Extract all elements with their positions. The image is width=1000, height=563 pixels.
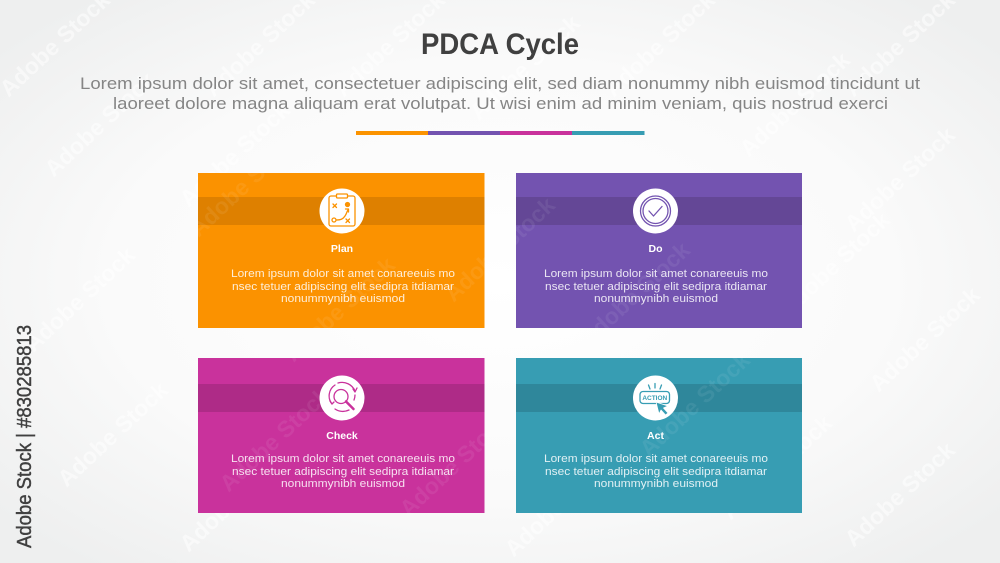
text: Adobe Stock	[174, 442, 295, 557]
text: Adobe Stock	[439, 192, 560, 307]
icon: strategy clipboard	[329, 194, 355, 226]
text block: Do: nsec tetuer adipiscing elit sedipra itdiamar	[545, 281, 767, 293]
text block: Plan: Lorem ipsum dolor sit amet conareeuis mo	[231, 268, 455, 280]
text block: Plan: nonummynibh euismod	[281, 293, 405, 305]
text: Adobe Stock	[864, 282, 985, 397]
text: Adobe Stock	[464, 10, 585, 125]
text: Adobe Stock	[716, 410, 837, 525]
text: Adobe Stock	[734, 47, 855, 162]
text: Adobe Stock	[499, 447, 620, 562]
text block: Plan	[231, 268, 455, 305]
text block: Do	[544, 268, 768, 305]
text block: Check: nonummynibh euismod	[281, 478, 405, 490]
subtitle text: laoreet dolore magna aliquam erat volutpat. Ut wisi enim ad minim veniam, quis nostrud exerci	[113, 94, 888, 113]
text: Adobe Stock	[574, 237, 695, 352]
text block: Check: nsec tetuer adipiscing elit sedipra itdiamar	[232, 466, 454, 478]
divider: four-colour bar	[356, 131, 644, 135]
text: Adobe Stock	[839, 122, 960, 237]
title: PDCA Cycle	[421, 28, 579, 61]
icon: check badge	[640, 196, 670, 226]
text: Adobe Stock	[184, 127, 305, 242]
text: Adobe Stock	[634, 347, 755, 462]
icon: action button with cursor: ACTION	[642, 395, 668, 402]
heading: Plan: Plan	[331, 243, 353, 255]
text block: Check	[231, 453, 455, 490]
text block: Act	[544, 453, 768, 490]
panel: Do	[516, 173, 802, 328]
icon: action button with cursor	[640, 384, 670, 415]
heading: Do: Do	[648, 243, 662, 255]
text: Adobe Stock	[39, 67, 160, 182]
text block: Plan: nsec tetuer adipiscing elit sedipra itdiamar	[232, 281, 454, 293]
text block: Check: Lorem ipsum dolor sit amet conareeuis mo	[231, 453, 455, 465]
text: Adobe Stock	[774, 207, 895, 322]
heading: Check: Check	[326, 430, 358, 442]
text: Adobe Stock	[279, 252, 400, 367]
text block: Act: nsec tetuer adipiscing elit sedipra itdiamar	[545, 466, 767, 478]
heading: Act: Act	[647, 430, 664, 442]
panel: Check	[198, 358, 484, 513]
text: Adobe Stock	[174, 97, 295, 212]
text: Adobe Stock	[19, 242, 140, 357]
text: Adobe Stock	[214, 382, 335, 497]
text: Adobe Stock	[52, 377, 173, 492]
subtitle text: Lorem ipsum dolor sit amet, consectetuer adipiscing elit, sed diam nonummy nibh euismod tincidunt ut	[80, 74, 920, 93]
panel: Plan	[198, 173, 484, 328]
subtitle text	[80, 74, 920, 113]
text block: Act: Lorem ipsum dolor sit amet conareeuis mo	[544, 453, 768, 465]
text: Adobe Stock	[394, 407, 515, 522]
text block: Act: nonummynibh euismod	[594, 478, 718, 490]
vertical stock credit: Adobe Stock | #830285813	[14, 325, 36, 548]
text block: Do: nonummynibh euismod	[594, 293, 718, 305]
panel: Act	[516, 358, 802, 513]
icon: magnifier cycle	[329, 382, 357, 411]
text: Adobe Stock	[839, 437, 960, 552]
text block: Do: Lorem ipsum dolor sit amet conareeuis mo	[544, 268, 768, 280]
